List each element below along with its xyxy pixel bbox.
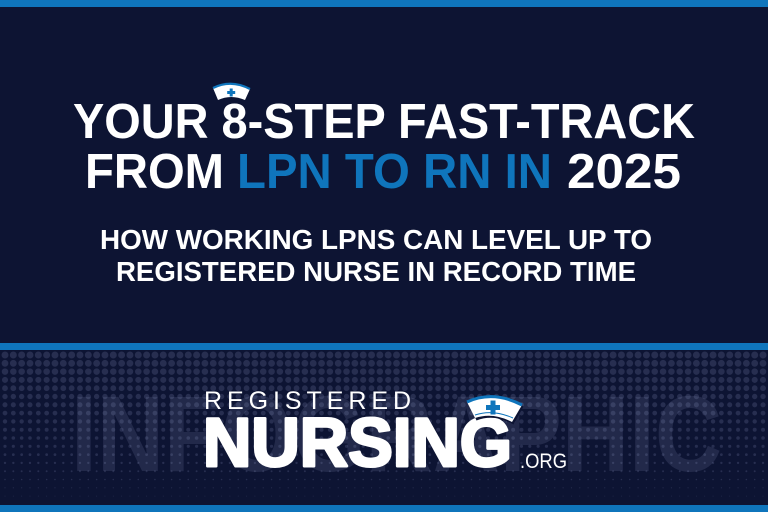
top accent bar [0, 0, 768, 7]
icon: small nurse cap above the 8 [213, 84, 250, 100]
divider bar [0, 343, 768, 350]
subtitle: HOW WORKING LPNS CAN LEVEL UP TO [100, 224, 652, 255]
title: YOUR 8-STEP FAST-TRACK [73, 95, 695, 149]
bottom accent bar [0, 505, 768, 512]
subtitle: REGISTERED NURSE IN RECORD TIME [116, 256, 636, 287]
title: FROM [85, 145, 224, 199]
footer panel [0, 350, 768, 505]
icon: logo nurse cap [467, 397, 524, 424]
logo [203, 387, 567, 481]
subtitle [100, 224, 652, 287]
title [73, 95, 695, 199]
logo word: .org: .ORG [520, 450, 567, 473]
title: LPN TO RN IN [237, 145, 552, 199]
logo word: registered: REGISTERED [204, 387, 411, 415]
title: 2025 [567, 145, 681, 199]
logo word: nursing: NURSING [203, 404, 512, 481]
